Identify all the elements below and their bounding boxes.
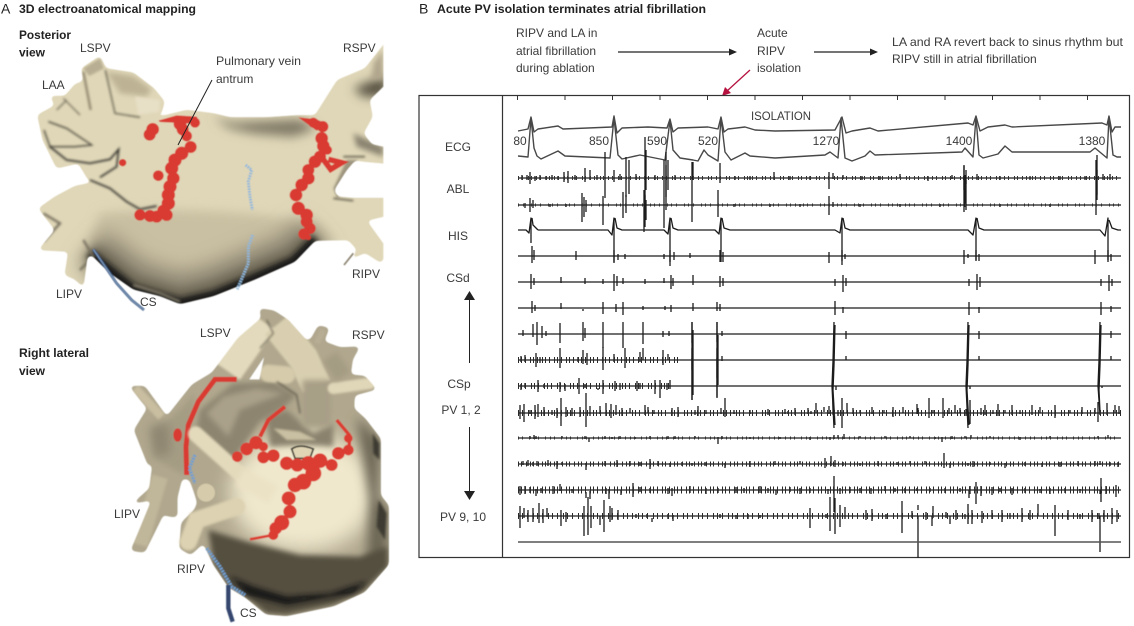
channel labels: CSd (446, 271, 470, 285)
CS catheter cable (228, 585, 233, 622)
PV traces (518, 393, 1121, 558)
channel labels: PV 1, 2 (441, 403, 481, 417)
ablation lesion line: left veins (173, 379, 237, 475)
panel A heading: 3D electroanatomical mapping (19, 2, 196, 16)
ABL traces (518, 137, 1121, 232)
heart map: right lateral view (127, 303, 393, 622)
isolation label: ISOLATION (751, 109, 811, 123)
flow text: acute RIPV isolation (757, 26, 801, 75)
ECG interval values: 1400 (946, 134, 973, 148)
ablation lesion dots: right antrum (290, 117, 342, 240)
vein ostium (292, 446, 313, 458)
panel A: right lateral view label (19, 346, 89, 378)
panel A: posterior view label (19, 28, 71, 60)
panel A: right lateral view label: view (19, 364, 46, 378)
panel B heading: Acute PV isolation terminates atrial fibrillation (437, 2, 706, 16)
label CS: CS (240, 606, 257, 620)
label RIPV: RIPV (177, 562, 205, 576)
CS catheter cable (93, 249, 144, 310)
label LIPV: LIPV (114, 507, 140, 521)
channel labels: ECG (445, 140, 471, 154)
channel labels: PV 9, 10 (440, 510, 486, 524)
channel labels: CSp (447, 377, 471, 391)
ablation lesion dots: left antrum (119, 115, 200, 223)
flow text: acute RIPV isolation: RIPV (757, 44, 785, 58)
ECG interval values: 590 (647, 134, 667, 148)
vein spur RIPV (344, 253, 353, 265)
flow text: outcome (892, 35, 1124, 66)
flow text: outcome: LA and RA revert back to sinus rhythm but (892, 35, 1124, 49)
HIS traces (518, 218, 1121, 266)
label LSPV: LSPV (200, 326, 231, 340)
red arrow marking isolation (722, 70, 750, 96)
flow text: during ablation: atrial fibrillation (516, 44, 596, 58)
label RIPV: RIPV (352, 267, 380, 281)
label RSPV: RSPV (343, 41, 376, 55)
CS proximal traces (518, 322, 1121, 428)
flow text: during ablation: during ablation (516, 61, 595, 75)
panel B heading: B (419, 0, 428, 16)
label pulmonary vein antrum: Pulmonary vein (216, 54, 301, 68)
label pulmonary vein antrum (216, 54, 301, 86)
channel labels: HIS (448, 229, 468, 243)
flow text: acute RIPV isolation: isolation (757, 61, 801, 75)
ECG traces (518, 116, 1121, 161)
panel A: right lateral view label: Right lateral (19, 346, 89, 360)
arrow up to CSd (464, 291, 475, 363)
pointer line to antrum (178, 80, 212, 145)
panel A: posterior view label: Posterior (19, 28, 71, 42)
label LIPV: LIPV (56, 287, 82, 301)
arrow down to PV 9,10 (464, 427, 475, 500)
ECG interval values: 520 (698, 134, 718, 148)
panel A heading: A (1, 0, 11, 16)
panel B: electrogram box (419, 96, 1130, 558)
label RSPV: RSPV (352, 328, 385, 342)
flow text: during ablation: RIPV and LA in (516, 26, 597, 40)
heart map: posterior view (30, 40, 397, 313)
arrow to acute isolation (618, 48, 737, 56)
mapping catheter trace (237, 165, 253, 289)
CSd traces (518, 274, 1121, 315)
channel labels: ABL (447, 182, 470, 196)
arrow to sinus rhythm (814, 48, 878, 56)
label LAA: LAA (42, 78, 65, 92)
panel A: posterior view label: view (19, 46, 46, 60)
ECG interval values: 1380 (1079, 134, 1106, 148)
RIPV upper tube in front of lesion line (188, 434, 273, 542)
ablation lesion line: right veins (232, 407, 354, 540)
label LSPV: LSPV (80, 41, 111, 55)
ECG interval values (513, 134, 1106, 148)
ECG interval values: 80 (513, 134, 527, 148)
label pulmonary vein antrum: antrum (216, 72, 253, 86)
flow text: acute RIPV isolation: Acute (757, 26, 788, 40)
ECG interval values: 850 (589, 134, 609, 148)
mapping catheter trace (189, 455, 245, 595)
flow text: during ablation (516, 26, 597, 75)
label CS: CS (140, 295, 157, 309)
channel labels (440, 140, 486, 524)
flow text: outcome: RIPV still in atrial fibrillation (892, 52, 1037, 66)
ECG interval values: 1270 (813, 134, 840, 148)
